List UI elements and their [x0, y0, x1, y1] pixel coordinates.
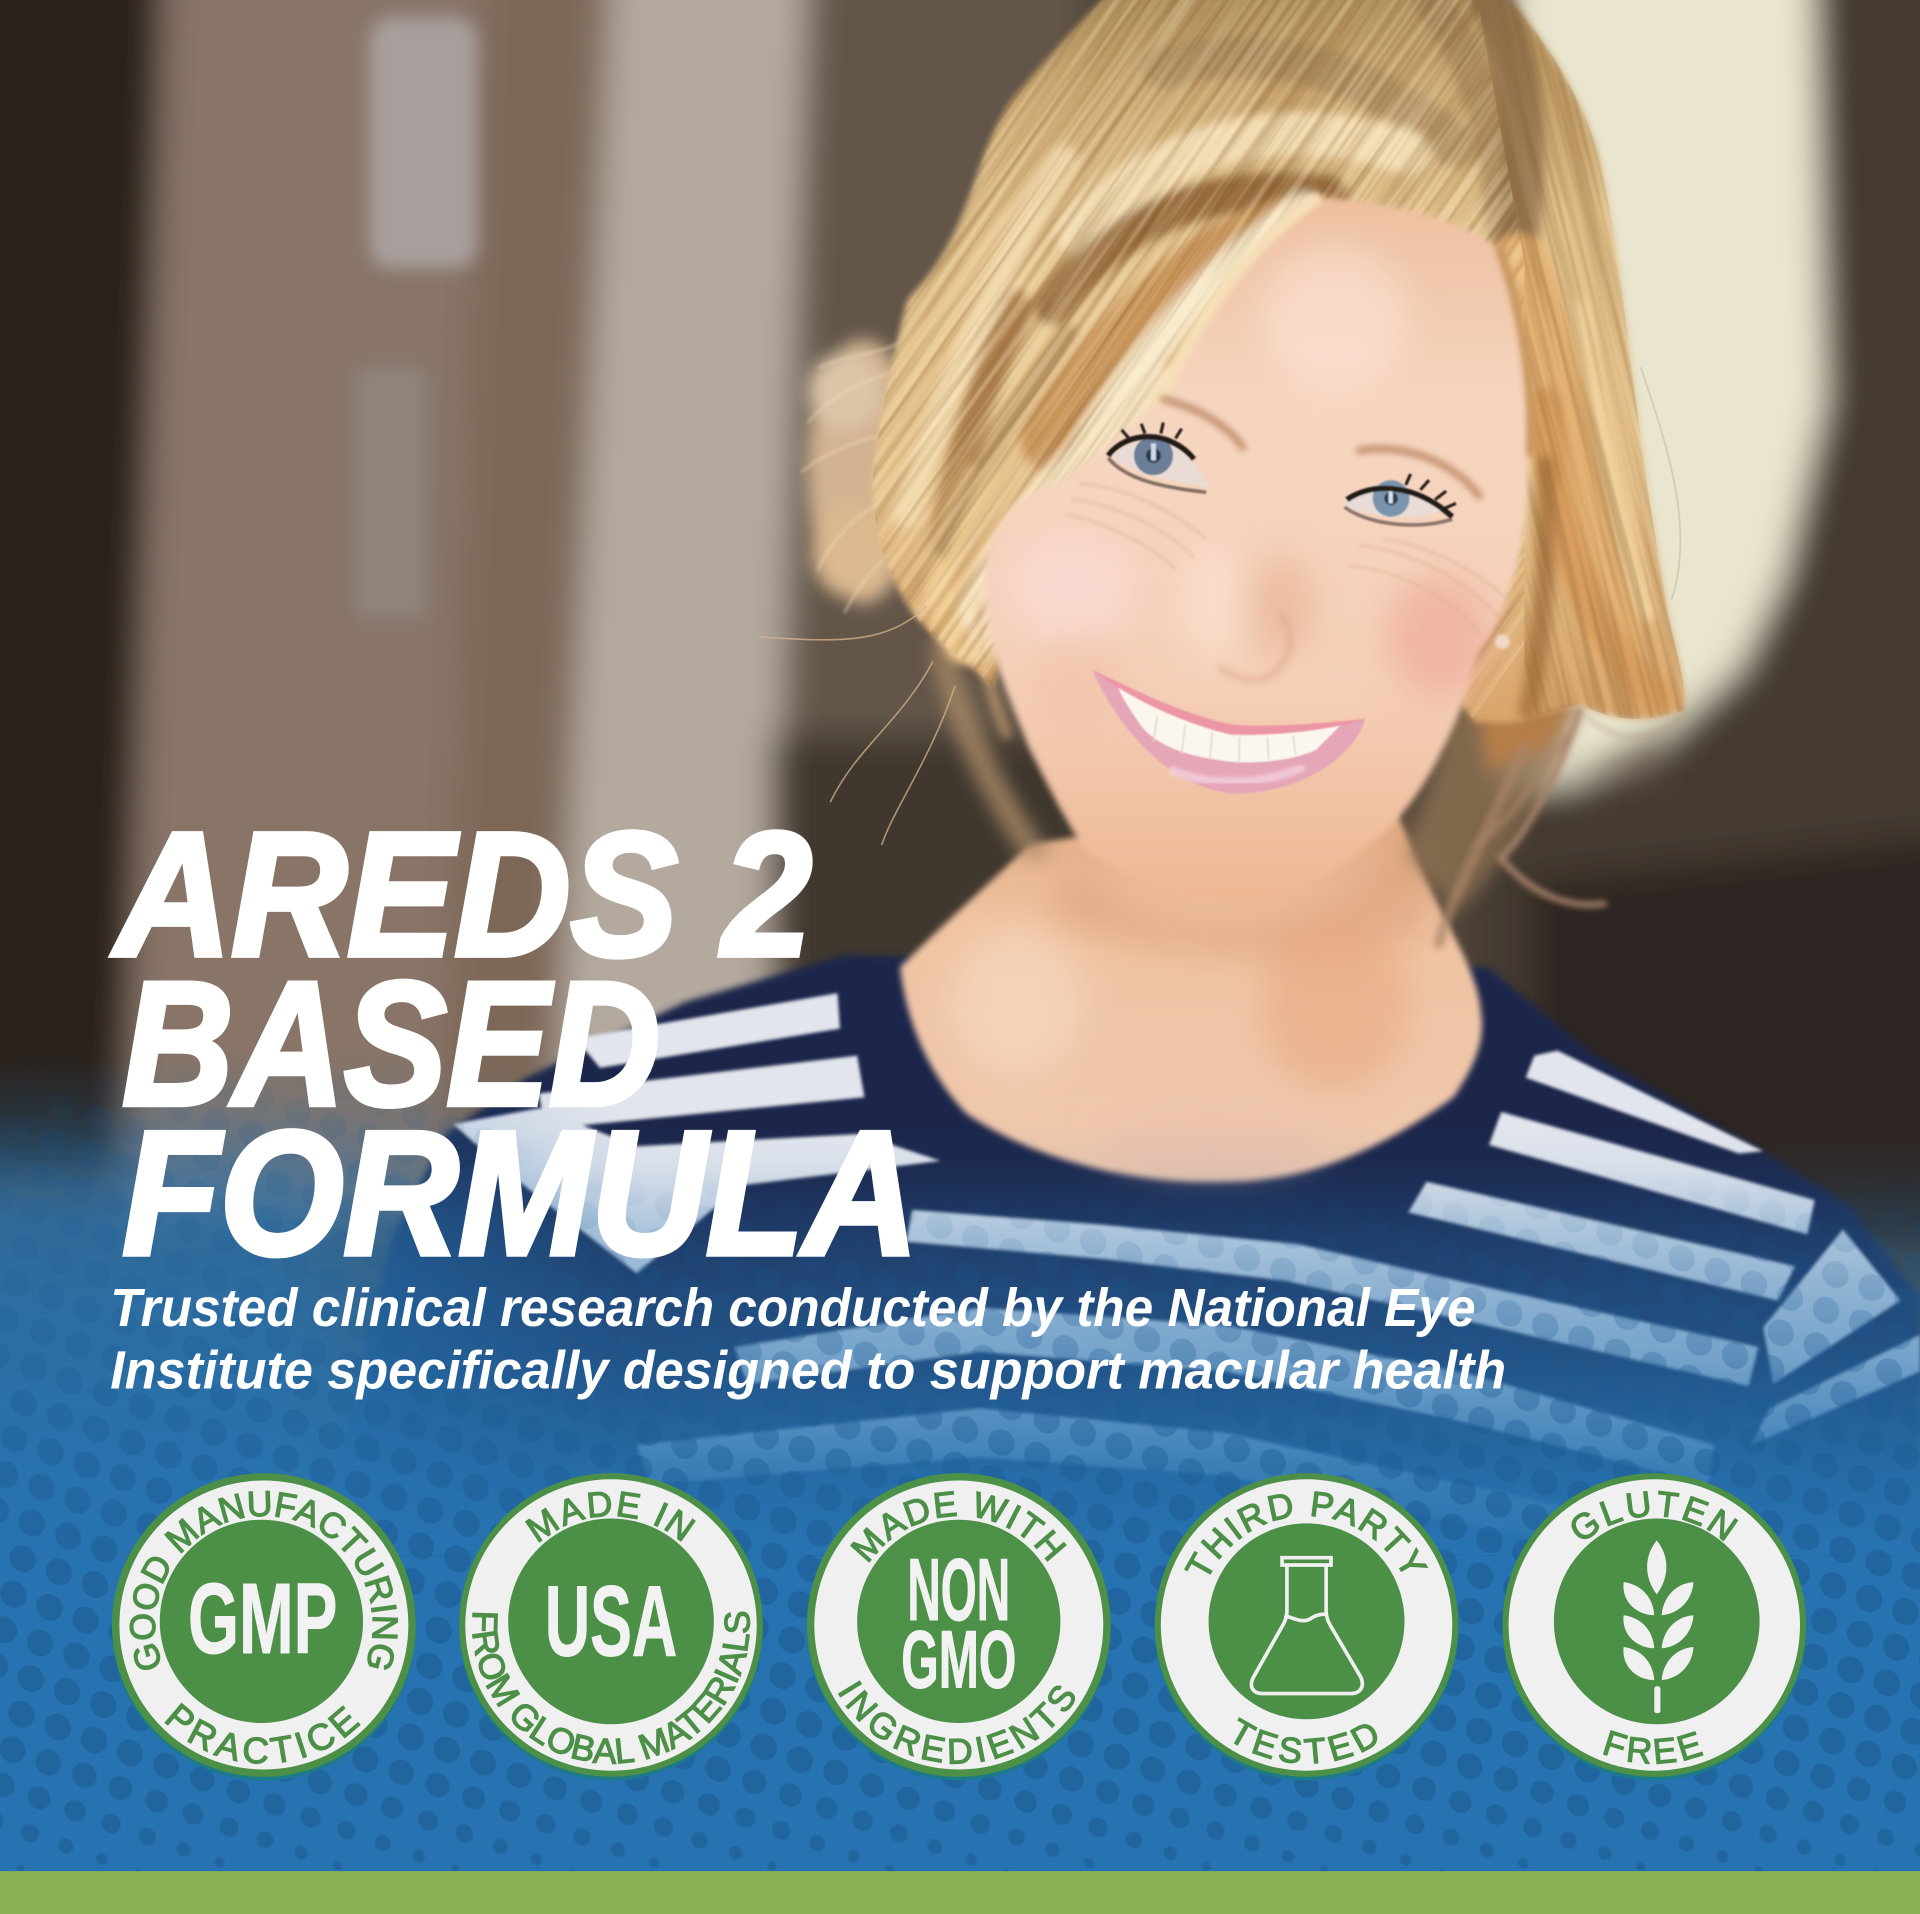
badge: USA — [459, 1473, 763, 1780]
badge: USA: FROM GLOBAL MATERIALS — [472, 1612, 750, 1764]
subtitle: Trusted clinical research conducted by the National Eye — [110, 1278, 1476, 1338]
hair edge over forehead — [1160, 200, 1531, 453]
title: AREDS 2 — [111, 796, 812, 993]
badge: GMP: GOOD MANUFACTURING — [130, 1490, 398, 1670]
blue gradient overlay — [0, 1127, 1920, 1469]
subtitle — [110, 1278, 1506, 1401]
nose — [1218, 612, 1290, 679]
fine hair texture — [872, 0, 1684, 719]
badge: NON GMO: GMO — [901, 1614, 1016, 1705]
shirt — [343, 955, 1920, 1914]
bun wisps — [802, 343, 912, 612]
solid blue lower panel — [0, 1555, 1920, 1874]
neck — [900, 784, 1482, 1182]
title: BASED — [122, 946, 660, 1143]
neck shading — [949, 808, 1433, 1169]
badge: NON GMO: MADE WITH — [850, 1490, 1067, 1563]
badge: third party tested: TESTED — [1234, 1717, 1378, 1764]
badge: NON GMO: NON — [907, 1540, 1010, 1639]
face — [985, 197, 1530, 900]
mouth: smile, teeth, lips — [1092, 670, 1365, 794]
loose hair wisps — [759, 367, 1680, 845]
hair lower right wisps — [1439, 710, 1685, 943]
badge: gluten free: FREE — [1602, 1730, 1704, 1764]
icon: right eye — [1341, 474, 1456, 525]
blue gradient overlay: lower fade — [0, 1469, 1920, 1555]
eye wrinkles — [1065, 484, 1509, 637]
badge: GMP — [112, 1473, 416, 1780]
badge: GMP: GMP — [188, 1563, 337, 1675]
earring — [1495, 634, 1510, 649]
badge: third party tested: THIRD PARTY — [1184, 1491, 1428, 1575]
cheek blush and nose shading — [1004, 245, 1490, 735]
badge: gluten free: GLUTEN — [1571, 1490, 1738, 1542]
hair strands and highlights — [906, 0, 1653, 735]
title: FORMULA — [122, 1095, 918, 1292]
photo: woman with striped shirt — [362, 0, 1920, 1556]
subtitle: Institute specifically designed to support macular health — [110, 1341, 1506, 1401]
badge: GMP: PRACTICE — [164, 1702, 361, 1764]
blue gradient overlay: left side — [0, 1071, 604, 1480]
back hair: blurred bun — [807, 339, 920, 604]
lower hair behind jaw — [931, 625, 1580, 912]
green footer bar — [0, 1871, 1920, 1914]
hair mass — [872, 0, 1685, 722]
eyebrows — [1163, 399, 1479, 496]
badge: USA: USA — [545, 1566, 677, 1678]
title — [111, 796, 918, 1292]
icon: wheat — [1623, 1541, 1693, 1713]
badge: NON GMO — [806, 1473, 1111, 1780]
halftone dot pattern — [0, 1109, 1920, 1871]
badge: third party tested — [1154, 1473, 1458, 1780]
badge: NON GMO: INGREDIENTS — [838, 1680, 1076, 1764]
icon: left eye — [1108, 422, 1210, 492]
badge: gluten free — [1502, 1473, 1806, 1780]
badge: USA: MADE IN — [525, 1491, 696, 1543]
icon: flask — [1251, 1558, 1362, 1694]
